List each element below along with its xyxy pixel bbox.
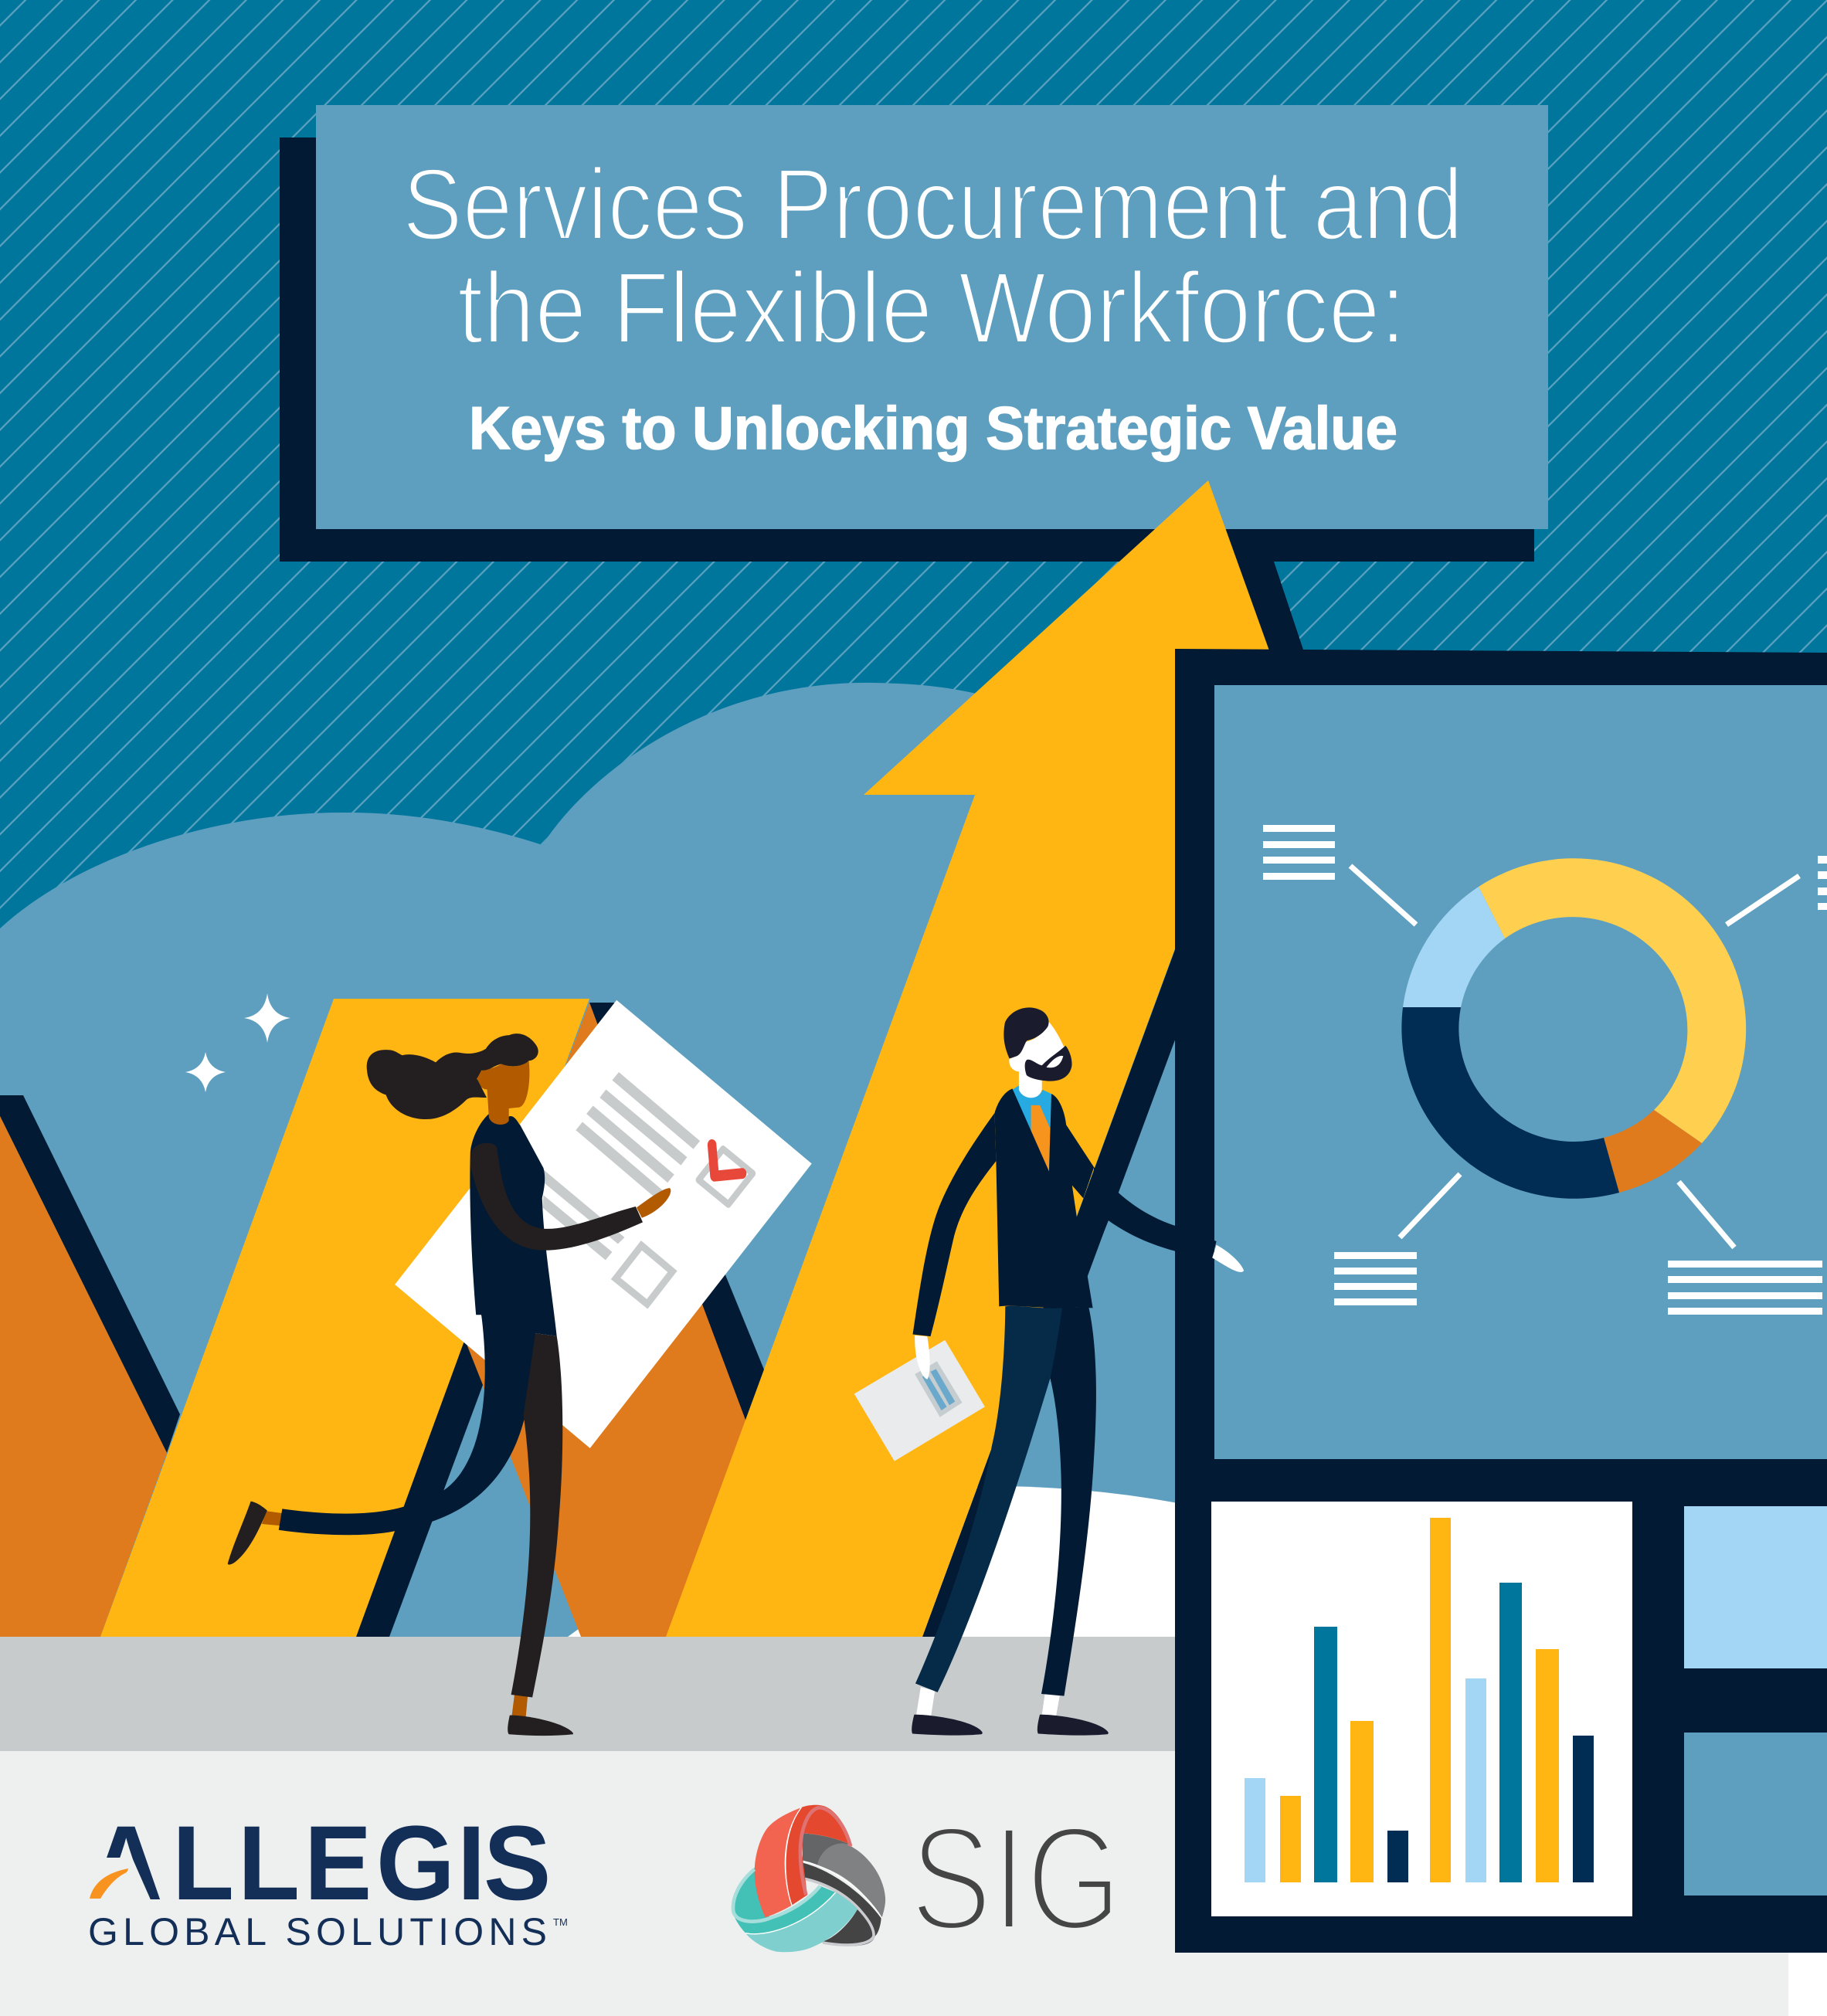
man left hand <box>915 1336 930 1380</box>
woman head <box>477 1061 529 1125</box>
dashboard panel <box>1175 649 1827 1953</box>
small yellow arrow shaft <box>100 999 589 1637</box>
ground strip <box>0 1637 1182 1751</box>
woman arm <box>470 1143 671 1251</box>
SIG interlocking rings <box>732 1805 885 1952</box>
man socks and shoes <box>912 1687 1109 1736</box>
man jacket <box>995 1088 1094 1308</box>
mid blue tile <box>1684 1733 1827 1896</box>
woman torso <box>470 1114 557 1339</box>
donut callout top left <box>1263 825 1416 925</box>
woman front leg <box>508 1333 573 1736</box>
navy band beside main arrow <box>922 931 1182 1637</box>
light blue tile <box>1684 1506 1827 1668</box>
man shirt and tie <box>1012 1085 1051 1172</box>
man head <box>1003 1007 1072 1098</box>
SIG wordmark: SIG <box>910 1795 1122 1961</box>
donut screen <box>1214 685 1827 1459</box>
title line 2: the Flexible Workforce: <box>457 251 1406 365</box>
woman with checklist <box>228 1000 812 1736</box>
man left arm <box>913 1113 996 1336</box>
man front leg <box>915 1306 1062 1692</box>
icon: sparkle large <box>244 993 290 1043</box>
main yellow arrow <box>666 480 1270 1637</box>
donut callout bottom left <box>1334 1174 1460 1305</box>
page bottom band <box>0 1751 1827 2016</box>
white hill <box>568 1486 1182 1637</box>
dark ring <box>803 1833 885 1946</box>
red ring <box>755 1805 852 1917</box>
trademark: TM <box>553 1916 568 1928</box>
document <box>854 1340 985 1461</box>
icon: sparkle small <box>185 1052 226 1092</box>
subtitle: Keys to Unlocking Strategic Value <box>469 394 1397 462</box>
teal ring interior <box>732 1868 770 1921</box>
man right hand <box>1212 1245 1244 1272</box>
bar chart <box>1211 1502 1632 1916</box>
title line 1: Services Procurement and <box>402 148 1463 261</box>
orange mountain behind paper <box>356 1003 827 1637</box>
Allegis wordmark: ALLEGIS <box>90 1804 551 1923</box>
title panel <box>316 105 1548 529</box>
title panel shadow <box>280 137 1534 562</box>
Allegis orange swoosh <box>90 1868 128 1899</box>
logo: SIG <box>732 1795 1122 1961</box>
woman back leg <box>228 1315 535 1565</box>
teal ring <box>732 1868 857 1952</box>
cloud background shape <box>0 683 1236 1637</box>
logo: Allegis Global Solutions <box>81 1804 568 1953</box>
donut callout top right <box>1727 856 1827 925</box>
donut chart <box>1401 858 1746 1199</box>
Global Solutions line: GLOBAL SOLUTIONS <box>88 1910 547 1953</box>
left mountain <box>0 1095 180 1637</box>
Allegis A cut-out <box>81 1858 152 1903</box>
donut callout bottom right <box>1668 1182 1822 1315</box>
man with document <box>854 1007 1244 1736</box>
man back leg <box>1041 1307 1096 1696</box>
checklist paper <box>395 1000 812 1448</box>
woman hair <box>367 1033 538 1119</box>
navy band beside arrow head <box>1208 480 1313 680</box>
man right arm <box>1086 1167 1217 1276</box>
